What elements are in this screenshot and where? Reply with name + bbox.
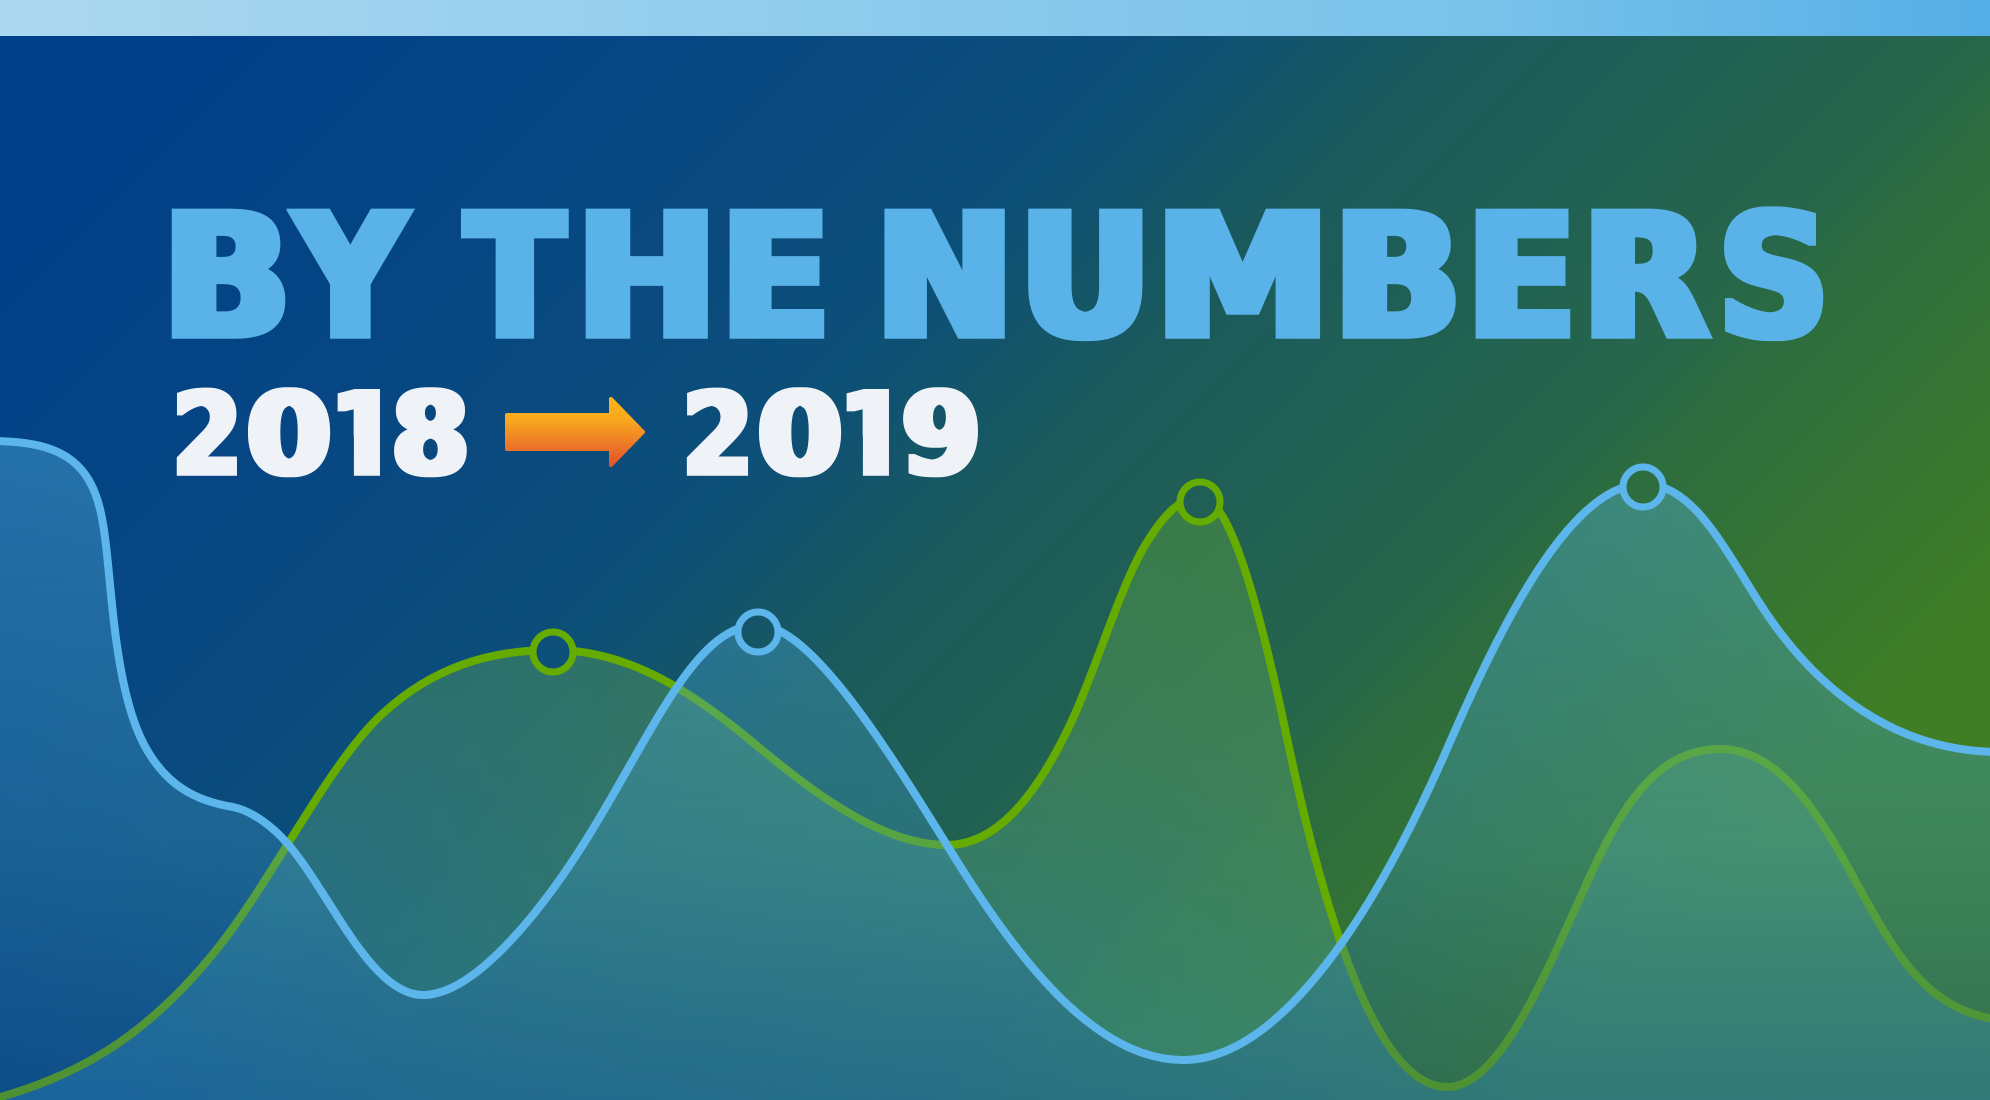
year 2018: 0 <box>247 369 331 502</box>
chart: green area series <box>0 482 1990 1100</box>
year 2019: 1 <box>841 369 906 502</box>
year 2018: 8 <box>392 369 469 502</box>
title: by the numbers: H <box>577 178 716 377</box>
year 2019 <box>682 369 981 502</box>
title: by the numbers: M <box>1156 178 1330 377</box>
green marker: first peak <box>533 632 573 672</box>
title: by the numbers: E <box>1467 178 1576 377</box>
year 2019: 2 <box>682 369 752 502</box>
title: by the numbers: E <box>721 178 830 377</box>
blue marker: first peak <box>738 612 778 652</box>
year 2019: 0 <box>758 369 842 502</box>
year 2018 <box>172 369 469 502</box>
blue area fill and line <box>0 441 1990 1100</box>
title: by the numbers: N <box>876 178 1013 377</box>
title: by the numbers: Y <box>294 178 405 377</box>
title: by the numbers: S <box>1718 178 1828 377</box>
top light blue bar <box>0 0 1990 36</box>
green area fill and line <box>0 497 1990 1100</box>
year 2018: 2 <box>172 369 241 502</box>
title: by the numbers: R <box>1583 178 1708 377</box>
icon: orange arrow <box>505 397 646 468</box>
chart: blue area series <box>0 441 1990 1100</box>
title: by the numbers: B <box>163 178 290 377</box>
title: by the numbers: U <box>1020 178 1150 377</box>
title: by the numbers: B <box>1334 178 1461 377</box>
green marker: second peak <box>1180 482 1220 522</box>
title: by the numbers <box>163 178 1828 459</box>
subtitle: years with arrow <box>172 369 981 502</box>
year 2019: 9 <box>902 369 981 502</box>
year 2018: 1 <box>332 369 397 502</box>
blue marker: second peak <box>1623 467 1663 507</box>
title: by the numbers: T <box>466 178 563 377</box>
